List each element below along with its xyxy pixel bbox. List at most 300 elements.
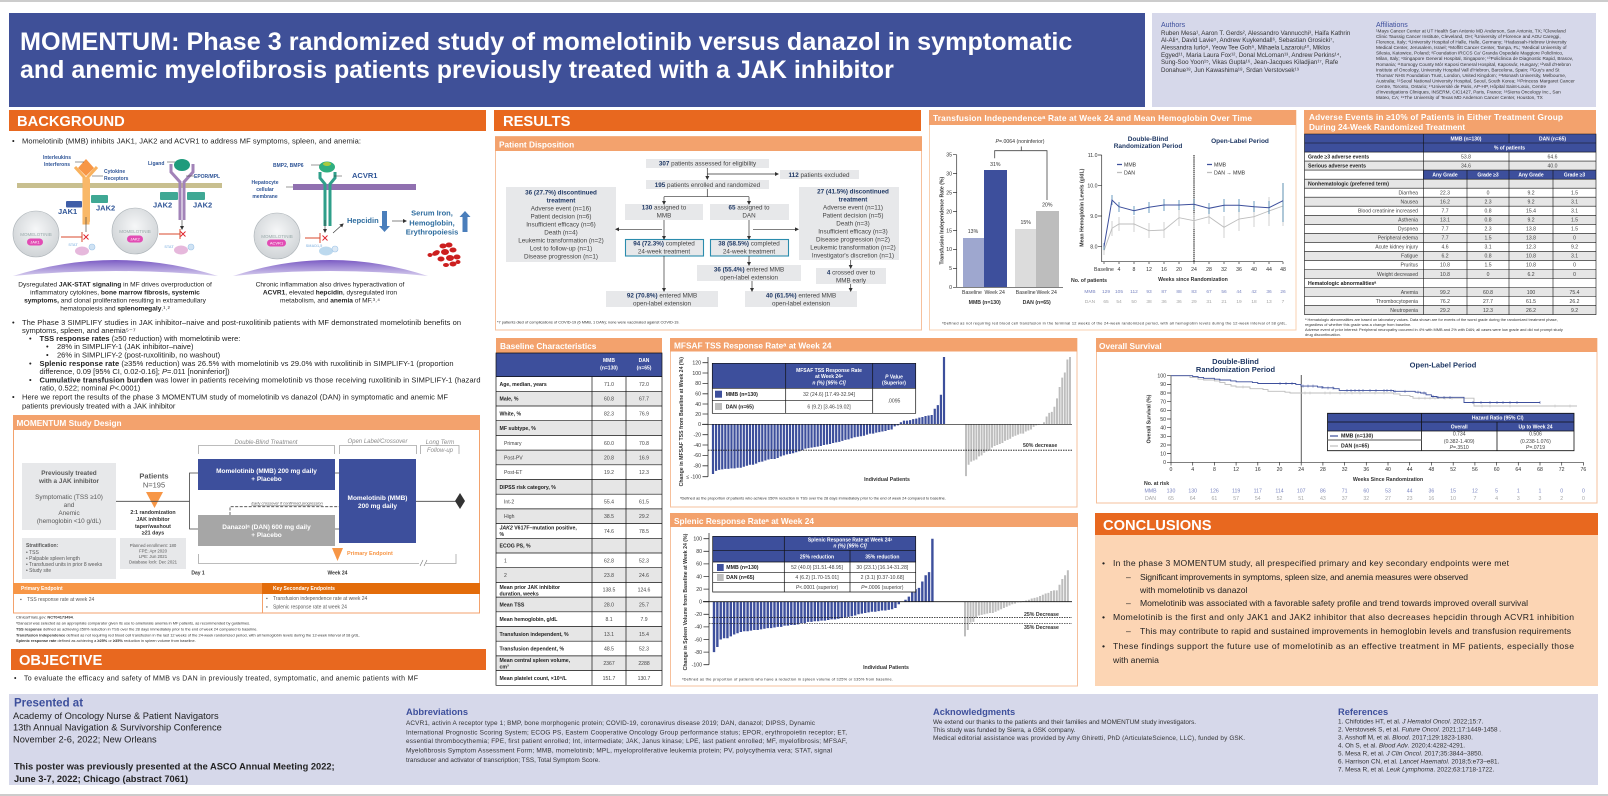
flow text: open-label extension (633, 301, 692, 308)
references: 6. Harrison CN, et al. Lancet Haematol. 2018;5:e73–e81. (1338, 759, 1500, 766)
values: 99.2 (1440, 290, 1450, 296)
line chart: mean hemoglobin: 38 (1146, 299, 1152, 305)
table body: Diarrhea (1398, 190, 1418, 196)
line chart: mean hemoglobin: Randomization Period (1114, 143, 1182, 150)
panel: patient disposition: Patient Disposition (499, 140, 574, 150)
row values: 82.3 (604, 411, 614, 417)
panel: baseline characteristics table: (n=65) (637, 366, 652, 372)
diagram: JAK-STAT signaling: Interleukins (43, 155, 71, 161)
waterfall chart: spleen: 25% Decrease (1024, 612, 1059, 618)
number at risk: 71 (1342, 489, 1348, 495)
row labels: Mean TSS (500, 602, 525, 608)
waterfall chart: spleen: 60 (696, 562, 702, 568)
patients at risk: 105 (1115, 289, 1123, 295)
row labels: Nonhematologic (preferred term) (1308, 182, 1389, 188)
values: 10.8 (1440, 272, 1450, 278)
values: 7.7 (1441, 208, 1449, 214)
embedded table: TSS: (Superior) (882, 380, 906, 386)
footnotes: adverse events (1305, 317, 1563, 337)
caption: JAK-STAT: symptoms, and clonal proliferation resulting in extramedullary (24, 298, 207, 304)
number at risk: 3 (1517, 496, 1520, 502)
footnote: TSS: ᵃDefined as the proportion of patients who achieve ≥50% reduction in TSS over the 28 days immediately prior to the end of week 24 compared to baseline. (680, 496, 946, 500)
values: 75.4 (1570, 290, 1580, 296)
presented at: June 3-7, 2022; Chicago (abstract 7061) (14, 774, 188, 784)
number at risk: 65 (1168, 496, 1174, 502)
panel: baseline characteristics table: 2 (504, 573, 507, 579)
flow text: 24-week treatment (723, 249, 775, 256)
footnotes: adverse events: drug discontinuation. (1305, 332, 1341, 337)
axis labels: 16 (1161, 267, 1167, 273)
number at risk (1144, 481, 1585, 502)
affiliations: Silesia, Katowice, Poland; ⁸Foundation IRCCS Ca' Granda Ospedale Maggiore Policlinico, (1376, 51, 1563, 56)
presented at: Presented at (14, 698, 83, 710)
flow text: 94 (72.3%) completed (633, 241, 695, 248)
flow text: MMB (657, 213, 671, 220)
presented at (13, 698, 335, 784)
key secondary endpoints strip: Transfusion independence rate at week 24 (273, 596, 368, 602)
axis labels: 32 (1221, 267, 1227, 273)
row values: 60.0 (604, 441, 614, 447)
authors: Al-Ali⁴, David Lavie⁵, Andrew Kuykendall⁶, Sebastian Grosicki⁷, (1161, 37, 1334, 44)
row values: 16.9 (639, 456, 649, 462)
primary endpoint strip: ▪ (20, 597, 22, 603)
icon: up arrow (460, 211, 470, 232)
diagram: JAK-STAT signaling (13, 155, 222, 276)
patients at risk: 88 (1176, 289, 1182, 295)
acknowledgments: Medical editorial assistance was provided by Amy Ghiretti, PhD (ArticulateScience, LLC), funded by GSK. (933, 735, 1245, 742)
box text: MMB discontinued (518, 190, 604, 261)
table body (1304, 134, 1596, 315)
values: 3.1 (1571, 200, 1578, 206)
number at risk: MMB (1144, 489, 1157, 495)
box text: DAN discontinued: Disease progression (n=2) (816, 237, 890, 244)
patients at risk: 42 (1251, 289, 1257, 295)
footnotes: study design: ClinicalTrials.gov: NCT04173494. (16, 614, 74, 620)
caption: JAK-STAT: hematopoiesis and splenomegaly.¹˒² (60, 306, 171, 312)
conclusion bullets: with momelotinib vs danazol (1139, 585, 1248, 595)
line chart: mean hemoglobin: No. of patients (1071, 278, 1107, 284)
header labels: Any Grade (1518, 172, 1544, 178)
axis labels (1094, 267, 1286, 283)
axis labels: 12 (1146, 267, 1152, 273)
panel: conclusions: CONCLUSIONS (1103, 518, 1212, 534)
period headings: Randomization Period (1196, 365, 1276, 374)
line chart: mean hemoglobin: 54 (1116, 299, 1122, 305)
table body: Acute kidney injury (1375, 245, 1418, 251)
authors: Authors (1161, 22, 1186, 29)
Kaplan-Meier chart: 52 (1450, 467, 1456, 473)
box text: DAN discontinued: treatment (839, 197, 868, 204)
abbreviations: ACVR1, activin A receptor type 1; BMP, bone morphogenic protein; COVID-19, coronavirus disease 2019; DAN, danazol; DIPSS, Dynamic (406, 720, 816, 727)
hazard ratio table: Up to Week 24 (1518, 424, 1553, 430)
box text: DAN discontinued: Leukemic transformation (n=2) (810, 245, 896, 252)
authors: Donahue¹⁸, Jun Kawashima¹⁸, Srdan Verstovsek¹⁹ (1161, 67, 1300, 74)
caption: JAK-STAT (18, 282, 212, 312)
values: 27.7 (1483, 299, 1493, 305)
bullets: SIMPLIFY results (12, 318, 480, 410)
values: 1.5 (1484, 263, 1492, 269)
box text: DAN discontinued: 27 (41.5%) discontinued (817, 189, 889, 196)
bullets: SIMPLIFY results: ratio, 0.522; nominal P<.0001) (40, 384, 141, 392)
flow text: 307 patients assessed for eligibility (659, 161, 757, 168)
row values: 19.2 (604, 470, 614, 476)
panel: splenic response rate: Splenic Response Rateᵃ at Week 24 (674, 516, 814, 526)
box: enrollment dates: Planned enrollment: 180 (130, 543, 177, 548)
values: 26.2 (1570, 299, 1580, 305)
values: 9.2 (1527, 218, 1535, 224)
number at risk: 43 (1320, 496, 1326, 502)
values: 100 (1527, 290, 1535, 296)
table body: Thrombocytopenia (1376, 299, 1418, 305)
row labels: % (500, 532, 504, 538)
waterfall chart: spleen: -100 (692, 662, 702, 668)
icon: momelotinib JAK2 circle: JAK2 (130, 237, 141, 242)
number at risk: 114 (1275, 489, 1284, 495)
row values (603, 382, 651, 682)
row labels: MF subtype, % (500, 426, 536, 432)
number at risk: 130 (1188, 489, 1197, 495)
values: 53.8 (1461, 154, 1471, 160)
values: 9.2 (1527, 190, 1535, 196)
affiliations: Centre, Toronto, Ontario; ¹⁷Université de Paris, AP-HP, Hôpital Saint-Louis, Centre (1376, 84, 1546, 89)
values: 13.8 (1526, 227, 1536, 233)
waterfall chart: TSS: 20 (695, 412, 701, 418)
MMB bars (713, 357, 944, 474)
row values: 13.1 (604, 632, 614, 638)
affiliations: Institute of Oncology, University Hospital Vall d'Hebron, Barcelona, Spain; ¹³Guy's and St (1376, 67, 1560, 72)
patients N=195 and randomization: taper/washout (135, 524, 171, 530)
panel: adverse events table (1304, 110, 1596, 337)
line chart: mean hemoglobin: Double-Blind (1128, 136, 1168, 143)
diagram: JAK-STAT signaling: STAT (68, 243, 78, 247)
acknowledgments: Acknowledgments (933, 707, 1015, 717)
embedded table: TSS: n (%) [95% CI] (812, 380, 846, 386)
flow text: MMB early (836, 278, 867, 285)
waterfall chart: spleen: 35% Decrease (1024, 625, 1059, 631)
icon: ACVR1 receptor (319, 162, 335, 226)
number at risk: 44 (1407, 489, 1413, 495)
hazard ratio table: 0.734 (1453, 432, 1466, 438)
number at risk: 7 (1473, 496, 1476, 502)
number at risk: 12 (1472, 489, 1478, 495)
affiliations: Thomas' NHS Foundation Trust, London, United Kingdom; ¹⁴Monash University, Melbourne, (1376, 73, 1566, 78)
bullets: SIMPLIFY results: • (29, 359, 32, 368)
axis labels: 28 (1206, 267, 1212, 273)
Kaplan-Meier chart: 20 (1277, 467, 1282, 473)
row labels: cm³ (500, 664, 509, 670)
panel: baseline characteristics table: Post-PV (504, 456, 523, 462)
values: 2.3 (1484, 200, 1492, 206)
panel: baseline characteristics table (496, 338, 662, 685)
patients at risk (1084, 289, 1286, 295)
header labels: Grade ≥3 (1564, 172, 1585, 178)
abbreviations: transducer and activator of transcription; TSS, Total Symptom Score. (406, 757, 600, 764)
values: 10.8 (1526, 263, 1536, 269)
box: MMB arm: + Placebo (251, 476, 282, 483)
embedded table: TSS: MMB (n=130) (726, 392, 758, 398)
DAN bars (965, 570, 1068, 636)
hazard ratio table: Hazard Ratio (95% CI) (1472, 416, 1524, 422)
row values: 62.8 (604, 558, 614, 564)
row values: 52.3 (639, 558, 649, 564)
row values: 24.6 (639, 573, 649, 579)
flow text: 36 (55.4%) entered MMB (714, 267, 784, 274)
Kaplan-Meier chart: 70 (1160, 400, 1166, 406)
embedded table: TSS: .0095 (888, 398, 901, 404)
values: 34.6 (1461, 163, 1471, 169)
Kaplan-Meier chart: 12 (1233, 467, 1239, 473)
embedded table: TSS: 32 (24.6) [17.49-32.94] (803, 392, 855, 398)
diagram: JAK-STAT signaling: JAK2 (153, 200, 172, 210)
conclusion bullets: Significant improvements in symptoms, spleen size, and anemia measures were observed (1140, 572, 1468, 582)
presented at: This poster was previously presented at the ASCO Annual Meeting 2022; (14, 762, 335, 772)
panel: adverse events table: Adverse Events in ≥10% of Patients in Either Treatment Group (1309, 112, 1563, 122)
DAN curve (1171, 376, 1577, 408)
bullet: momelotinib mechanism: • (12, 136, 15, 146)
flow text: 40 (61.5%) entered MMB (766, 293, 836, 300)
bar chart: transfusion independence: DAN (n=65) (1023, 300, 1051, 306)
line chart: mean hemoglobin (1071, 136, 1286, 305)
treatment period brackets: Follow-up (427, 448, 454, 454)
waterfall chart: spleen: -40 (694, 625, 702, 631)
affiliations: ¹Mays Cancer Center at UT Health San Antonio MD Anderson, San Antonio, TX; ²Cleveland (1376, 28, 1566, 34)
conclusion bullets: • (1102, 641, 1105, 651)
row labels: DIPSS risk category, % (500, 485, 556, 491)
authors: Egyed¹¹, Maria Laura Fox¹², Donal McLornan¹³, Andrew Perkins¹⁴, (1161, 52, 1341, 59)
row values: 28.0 (604, 602, 614, 608)
legends: DAN → MMB (1214, 170, 1246, 176)
values: 64.6 (1548, 154, 1558, 160)
panel: footer (9, 694, 1598, 785)
waterfall chart: spleen (683, 533, 1072, 671)
patients N=195 and randomization: Patients (139, 472, 169, 480)
diagram: JAK-STAT signaling: JAK1 (58, 207, 77, 216)
row values: 61.5 (639, 500, 649, 506)
affiliations: Australia; ¹⁵Seoul National University Hospital, Seoul, South Korea; ¹⁶Princess Margaret Cancer (1376, 78, 1575, 83)
panel: overall survival: Overall Survival (1099, 341, 1162, 351)
treatment period brackets (198, 439, 459, 566)
bar chart: transfusion independence: Baseline (962, 290, 982, 296)
row labels (500, 382, 577, 682)
box: stratification: • Transfused units in prior 8 weeks (26, 562, 103, 568)
Kaplan-Meier chart: 40 (1385, 467, 1391, 473)
values: 9.2 (1571, 245, 1578, 251)
conclusion bullets: – (1126, 626, 1131, 636)
flow text: 38 (58.5%) completed (718, 241, 780, 248)
number at risk: 0 (1582, 489, 1585, 495)
waterfall chart: spleen: 40 (696, 574, 702, 580)
caption: ACVR1: ACVR1, elevated hepcidin, dysregulated iron (263, 290, 397, 296)
number at risk: 54 (1255, 496, 1261, 502)
references: References (1338, 707, 1388, 717)
flow arrows (616, 168, 851, 291)
Kaplan-Meier chart: 72 (1559, 467, 1565, 473)
values: 7.7 (1441, 227, 1449, 233)
panel: baseline characteristics table: 1 (504, 558, 507, 564)
diagram: ACVR1 hepcidin signaling: SMAD1,5 (306, 244, 322, 248)
caption: JAK-STAT: Dysregulated JAK-STAT signaling in MF drives overproduction of (18, 282, 212, 288)
row labels: Mean platelet count, ×10⁹/L (500, 676, 568, 682)
key secondary endpoints strip: Key Secondary Endpoints (273, 586, 335, 592)
row values: 76.9 (639, 411, 649, 417)
primary endpoint marker: Day 1 (191, 570, 205, 576)
panel: overall survival (1096, 338, 1597, 503)
waterfall chart: TSS (679, 357, 1072, 486)
flow text: 24-week treatment (638, 249, 690, 256)
values: 9.2 (1527, 200, 1535, 206)
row labels: duration, weeks (500, 592, 539, 598)
Kaplan-Meier chart: 64 (1515, 467, 1521, 473)
diagram: JAK-STAT signaling: EPOR/MPL (194, 174, 220, 180)
row values: 48.5 (604, 646, 614, 652)
Kaplan-Meier chart: 8 (1213, 467, 1216, 473)
waterfall chart: TSS: Individual Patients (864, 477, 910, 483)
table body: Pruritus (1400, 263, 1418, 269)
affiliations: Florence, Italy; ⁴University Hospital of Halle, Halle, Germany; ⁵Hadassah-Hebrew University (1376, 40, 1567, 45)
embedded table: spleen: 2 (3.1) [0.37-10.68] (861, 575, 905, 581)
embedded table: TSS: DAN (n=65) (726, 404, 754, 410)
waterfall chart: TSS: 40 (695, 402, 701, 408)
patients at risk: 93 (1146, 289, 1152, 295)
waterfall chart: TSS: 120 (692, 360, 701, 366)
panel: authors and affiliations (1152, 13, 1596, 107)
icon: momelotinib ACVR1 circle: MOMELOTINIB (261, 234, 293, 239)
diagram: ACVR1 hepcidin signaling: ACVR1 (352, 171, 377, 180)
box: stratification: Stratification: (26, 543, 59, 549)
references: 4. Oh S, et al. Blood Adv. 2020;4:4282-4291. (1338, 743, 1465, 750)
hazard ratio table: (0.382-1.409) (1444, 439, 1475, 445)
line chart: mean hemoglobin: DAN (1085, 299, 1096, 305)
box text: DAN discontinued: Adverse event (n=11) (823, 205, 883, 212)
axis labels: Baseline (1094, 267, 1114, 273)
table body: Asthenia (1398, 218, 1418, 224)
text: iron outcomes: Hemoglobin, (409, 218, 455, 228)
number at risk: 126 (1210, 489, 1219, 495)
box text: DAN discontinued: Patient decision (n=5) (822, 213, 884, 220)
Kaplan-Meier chart: 60 (1160, 408, 1166, 414)
Kaplan-Meier chart: 48 (1429, 467, 1434, 473)
number at risk: 107 (1297, 489, 1306, 495)
references: 1. Chifotides HT, et al. J Hematol Oncol. 2022;15:7. (1338, 718, 1484, 726)
values: 0 (1573, 236, 1576, 242)
caption: ACVR1: Chronic inflammation also drives hyperactivation of (256, 282, 405, 288)
diagram: JAK-STAT signaling: Ligand (148, 161, 164, 167)
conclusion bullets: • (1102, 612, 1105, 622)
row labels: Age, median, years (500, 382, 547, 388)
row labels: Grade ≥3 adverse events (1308, 154, 1369, 160)
Kaplan-Meier chart: 20 (1160, 443, 1166, 449)
flow text: 65 assigned to (729, 205, 770, 212)
row values: 20.8 (604, 456, 614, 462)
hazard ratio table: MMB (n=130) (1341, 434, 1373, 440)
diagram: ACVR1 hepcidin signaling (233, 162, 470, 276)
values: 13.8 (1526, 236, 1536, 242)
row values: 23.8 (604, 573, 614, 579)
embedded table: spleen: P<.0001 (superior) (796, 585, 838, 591)
box text: DAN discontinued: Death (n=3) (836, 221, 870, 228)
number at risk: 86 (1320, 489, 1326, 495)
abbreviations: Abbreviations (406, 707, 468, 717)
patients N=195 and randomization: JAK inhibitor (136, 517, 170, 523)
number at risk: 2 (1560, 496, 1563, 502)
panel: patient disposition (495, 136, 922, 330)
number at risk: 57 (1233, 496, 1239, 502)
text: iron outcomes (406, 208, 458, 236)
abbreviations (406, 707, 847, 764)
icon: momelotinib JAK1 circle (13, 211, 59, 257)
number at risk: 5 (1495, 489, 1498, 495)
box: stratification: • TSS (26, 550, 39, 556)
authors: Alessandra Iurlo⁸, Yeow Tee Goh⁹, Mihaela Lazaroiu¹⁰, Miklos (1161, 44, 1330, 52)
row values: 71.0 (604, 382, 614, 388)
footnotes: study design: Transfusion independence defined as not requiring red blood cell transfusion in the last 12 weeks of the 24-week randomized period, with all hemoglobin levels during the 12-week interval of ≥8 g/dL. (16, 632, 360, 638)
table body: Weight decreased (1377, 272, 1418, 278)
conclusion bullets: – (1126, 598, 1131, 608)
Kaplan-Meier chart: 28 (1320, 467, 1326, 473)
Kaplan-Meier chart: 4 (1191, 467, 1194, 473)
flow text (627, 161, 876, 308)
bullets: SIMPLIFY results: Splenic response rate (≥35% reduction) was 26.5% with momelotinib vs 29.0% with ruxolitinib in SIMPLIFY-1 (proportion (40, 359, 454, 368)
waterfall chart: TSS: Change in MFSAF TSS from Baseline at Week 24 (%) (679, 357, 685, 486)
row values: 29.2 (639, 514, 649, 520)
line chart: mean hemoglobin: 31 (1206, 299, 1212, 305)
icon: momelotinib JAK1 circle: MOMELOTINIB (20, 232, 52, 237)
Kaplan-Meier chart: 0 (1163, 460, 1166, 466)
primary endpoint strip (13, 583, 262, 603)
line chart: mean hemoglobin: 10.0 (1087, 184, 1098, 190)
acknowledgments: We extend our thanks to the patients and their families and MOMENTUM study investigators. (933, 719, 1196, 726)
row labels: White, % (500, 411, 522, 417)
box text: DAN discontinued (810, 189, 896, 260)
patients at risk: 44 (1236, 289, 1242, 295)
header labels: DAN (n=65) (1539, 136, 1566, 142)
embedded table: TSS (712, 363, 916, 413)
box: enrollment dates (120, 538, 186, 569)
values: 61.5 (1526, 299, 1536, 305)
bar chart: transfusion independence: Week 24 (985, 290, 1005, 296)
bar chart: transfusion independence: Week 24 (1037, 290, 1057, 296)
waterfall chart: TSS: -40 (694, 443, 701, 449)
hazard ratio table: DAN (n=65) (1341, 444, 1369, 450)
waterfall chart: TSS: 100 (692, 371, 701, 377)
values: 0.8 (1484, 208, 1492, 214)
panel: transfusion independence and hemoglobin: Transfusion Independenceᵃ Rate at Week 24 and Mean Hemoglobin Over Time (933, 113, 1252, 123)
number at risk: 16 (1429, 496, 1434, 502)
conclusion bullets: In the phase 3 MOMENTUM study, all prespecified primary and key secondary endpoints were met (1113, 558, 1510, 568)
box: eligibility: (hemoglobin <10 g/dL) (37, 518, 101, 525)
treatment period brackets: Double-Blind Treatment (235, 440, 298, 446)
line chart: mean hemoglobin: Mean Hemoglobin Levels (g/dL) (1080, 168, 1086, 247)
bullets: SIMPLIFY results: • (29, 376, 32, 384)
values: 0.8 (1484, 254, 1492, 260)
bullets: SIMPLIFY results: patients previously treated with a JAK inhibitor (22, 402, 176, 410)
MMB bars (714, 539, 932, 652)
number at risk: 10 (1450, 496, 1456, 502)
footnotes: study design: Splenic response rate defined as achieving a ≥25% or ≥35% reduction in spleen volume from baseline. (16, 638, 196, 643)
Kaplan-Meier chart: 44 (1407, 467, 1413, 473)
key secondary endpoints strip (262, 583, 480, 613)
bullets: SIMPLIFY results: • (29, 334, 32, 343)
waterfall chart: TSS: 60 (695, 392, 701, 398)
row values: 15.4 (639, 632, 649, 638)
values: 15.4 (1526, 208, 1536, 214)
panel: baseline characteristics table: MMB (603, 358, 615, 364)
waterfall chart: TSS: 80 (695, 381, 701, 387)
line chart: mean hemoglobin: 8.0 (1090, 244, 1098, 250)
conclusion bullets: • (1102, 558, 1105, 568)
table body: Peripheral edema (1378, 236, 1418, 242)
bar chart: transfusion independence: Transfusion Independence Rate (%) (940, 176, 946, 265)
